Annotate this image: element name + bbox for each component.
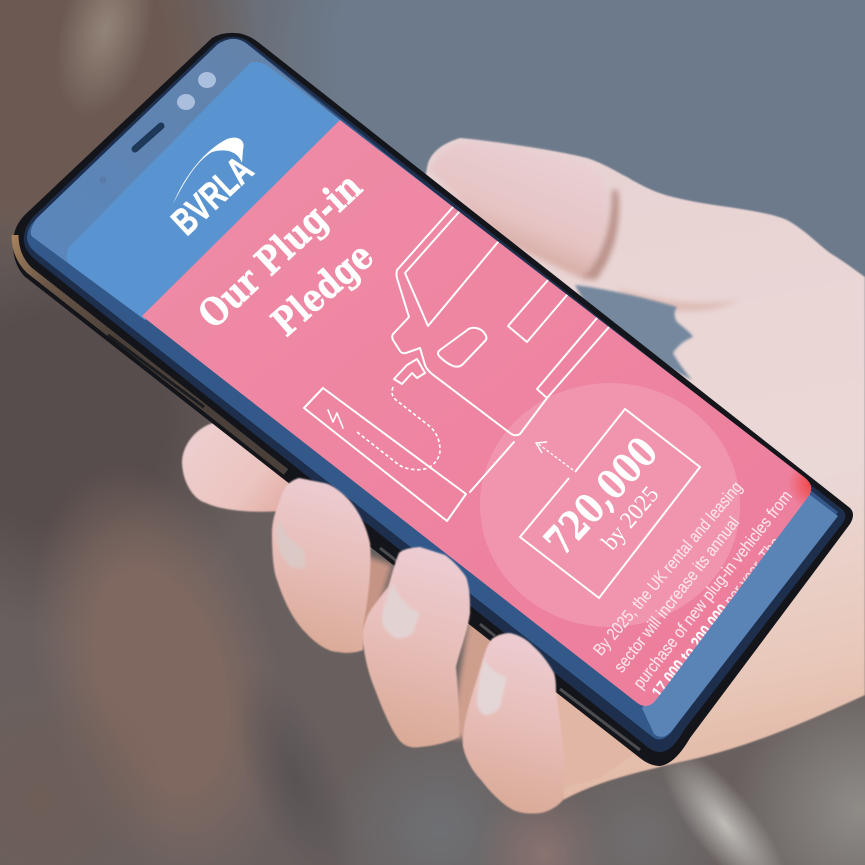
box outline — [520, 409, 700, 598]
stat number: 720,000 — [535, 428, 667, 565]
body text: 17,000 to 200,000 per year. The — [648, 534, 785, 701]
van side window — [508, 280, 567, 342]
finger: ring — [463, 633, 565, 814]
camera lens 1 — [177, 94, 195, 110]
gap between finger and palm — [575, 285, 693, 380]
nail: middle — [382, 583, 420, 638]
logo — [164, 138, 262, 244]
speaker slot — [135, 126, 161, 149]
highlight circle — [480, 383, 740, 627]
body text: sector will increase its annual — [610, 513, 743, 676]
title: Our Plug-in — [189, 163, 370, 337]
finger: index — [272, 478, 371, 653]
metal edge highlight — [380, 548, 640, 750]
title — [200, 179, 372, 338]
knuckle crease — [583, 190, 619, 280]
plug — [394, 359, 425, 384]
body text: By 2025, the UK rental and leasing — [589, 478, 746, 659]
logo swoosh — [173, 138, 244, 204]
title: Pledge — [262, 233, 382, 345]
screen: blue header — [66, 62, 345, 320]
logo wordmark: BVRLA — [164, 149, 262, 244]
dashed arrow — [536, 442, 573, 470]
finger: middle — [362, 547, 470, 747]
lightning bolt — [328, 410, 343, 428]
hand: palm and upper finger — [182, 138, 865, 800]
van lower front — [547, 327, 609, 398]
front sensor — [100, 176, 106, 184]
body text — [589, 478, 796, 701]
windscreen — [405, 212, 498, 326]
top bezel tint — [31, 39, 345, 320]
side button — [108, 335, 204, 407]
camera lens 2 — [198, 72, 216, 88]
van body outline — [392, 207, 597, 435]
lower line — [470, 442, 514, 492]
upper finger shading — [430, 142, 607, 280]
finger: thumb — [182, 421, 312, 512]
van and charger line drawing — [304, 207, 609, 521]
palm fold — [620, 290, 740, 311]
stat caption: by 2025 — [597, 482, 664, 555]
skin between fingers — [450, 610, 497, 738]
glass inner blue — [27, 39, 838, 740]
metal side edge — [15, 235, 286, 472]
body text: purchase of new plug-in vehicles from — [629, 487, 796, 692]
nail: index — [277, 518, 306, 568]
screen: lower blue band — [642, 492, 838, 737]
fingers in front of phone edge — [272, 478, 565, 814]
headlight — [438, 328, 486, 367]
charging cable — [357, 387, 440, 470]
screen: pink panel — [130, 110, 830, 720]
glass front — [24, 37, 845, 752]
charging point box — [304, 388, 466, 521]
stat box — [520, 409, 700, 598]
nail: ring — [477, 658, 507, 715]
